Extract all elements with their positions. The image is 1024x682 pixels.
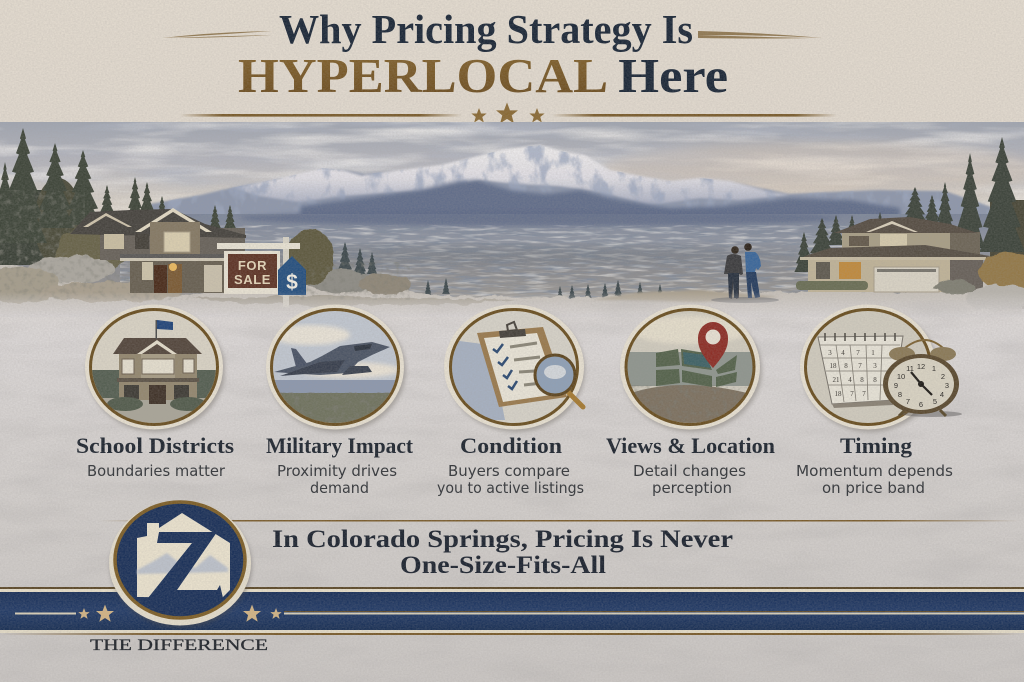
icon: jet medallion [266,304,406,433]
tagline text: One-Size-Fits-All [400,552,606,579]
title line one: Why Pricing Strategy Is [279,6,693,52]
sky [0,122,1024,212]
tagline text: In Colorado Springs, Pricing Is Never [272,526,733,553]
calendar: 3 [873,362,877,370]
left house [70,208,246,293]
right house [796,217,1024,311]
title [162,6,822,103]
calendar: 8 [873,376,877,384]
alarm clock: 8 [898,390,902,399]
alarm clock: 6 [919,400,923,409]
calendar: 4 [848,376,852,384]
alarm clock: 11 [906,364,914,373]
alarm clock: 9 [894,381,898,390]
text: views and location [633,462,746,497]
clipboard [477,322,567,407]
item: views and location [606,304,775,497]
calendar: 7 [856,349,860,357]
text: condition [437,462,584,497]
magnifying glass [535,355,583,407]
heading: military impact: Military Impact [266,433,414,458]
for sale sign: FOR [238,258,267,273]
calendar [818,333,903,408]
left trees [0,128,237,266]
text: timing: on price band [822,479,925,497]
alarm clock: 12 [917,362,925,371]
text: military impact: demand [310,479,369,497]
calendar: 8 [844,362,848,370]
calendar: 18 [834,390,842,398]
mountains in logo [137,553,228,574]
tree line in valley [338,242,662,299]
tagline [100,520,1020,579]
heading: views and location: Views & Location [606,433,775,458]
logo [109,500,252,628]
calendar: 1 [871,349,875,357]
icon: calendar and clock medallion [800,304,962,432]
tagline text [272,526,733,579]
text: timing [796,462,953,497]
paper mottling [0,300,1024,682]
heading: school districts: School Districts [76,433,234,458]
calendar: 18 [830,362,837,370]
text: condition: you to active listings [437,479,584,497]
alarm clock: 5 [933,397,937,406]
two people [711,243,779,303]
calendar: 4 [841,349,845,357]
text: school districts: Boundaries matter [87,462,226,480]
title line two: HYPERLOCAL Here [238,48,728,103]
text: views and location: Detail changes [633,462,746,480]
for sale sign [217,237,306,307]
logo caption: THE DIFFERENCE [90,637,268,654]
icon: clipboard medallion [444,304,585,432]
foreground ground [0,265,1022,310]
calendar: 3 [828,349,832,357]
banner stars [78,604,282,622]
text: military impact: Proximity drives [277,462,397,480]
text: military impact [277,462,397,497]
house shape [137,513,230,598]
footer banner [0,587,1024,635]
alarm clock: 2 [941,372,945,381]
valley [0,210,1024,309]
landscape scene [0,122,1024,320]
calendar: 7 [858,362,862,370]
snow fade [0,292,1024,317]
text: timing: Momentum depends [796,462,953,480]
icon: map pin medallion [620,304,762,432]
left bushes [0,226,411,303]
alarm clock: 1 [932,364,936,373]
icon: school house medallion [85,304,225,432]
title divider with stars [180,102,837,123]
text: condition: Buyers compare [448,462,570,480]
calendar: 8 [860,376,864,384]
item: timing [796,304,962,497]
alarm clock: 7 [906,397,910,406]
letter Z [148,532,223,598]
alarm clock [883,340,962,417]
mountains [151,144,990,214]
item: condition [437,304,585,497]
item: school districts [76,304,234,480]
calendar: 7 [850,390,854,398]
alarm clock: 4 [940,390,944,399]
heading: timing: Timing [840,433,912,458]
alarm clock: 10 [897,372,905,381]
calendar: 7 [862,390,866,398]
calendar: 21 [832,376,840,384]
item: military impact [266,304,414,497]
text: views and location: perception [652,479,732,497]
price tag: $ [286,271,298,294]
heading: condition: Condition [460,433,562,458]
for sale sign: SALE [234,272,271,287]
right trees [794,137,1024,272]
alarm clock: 3 [945,381,949,390]
